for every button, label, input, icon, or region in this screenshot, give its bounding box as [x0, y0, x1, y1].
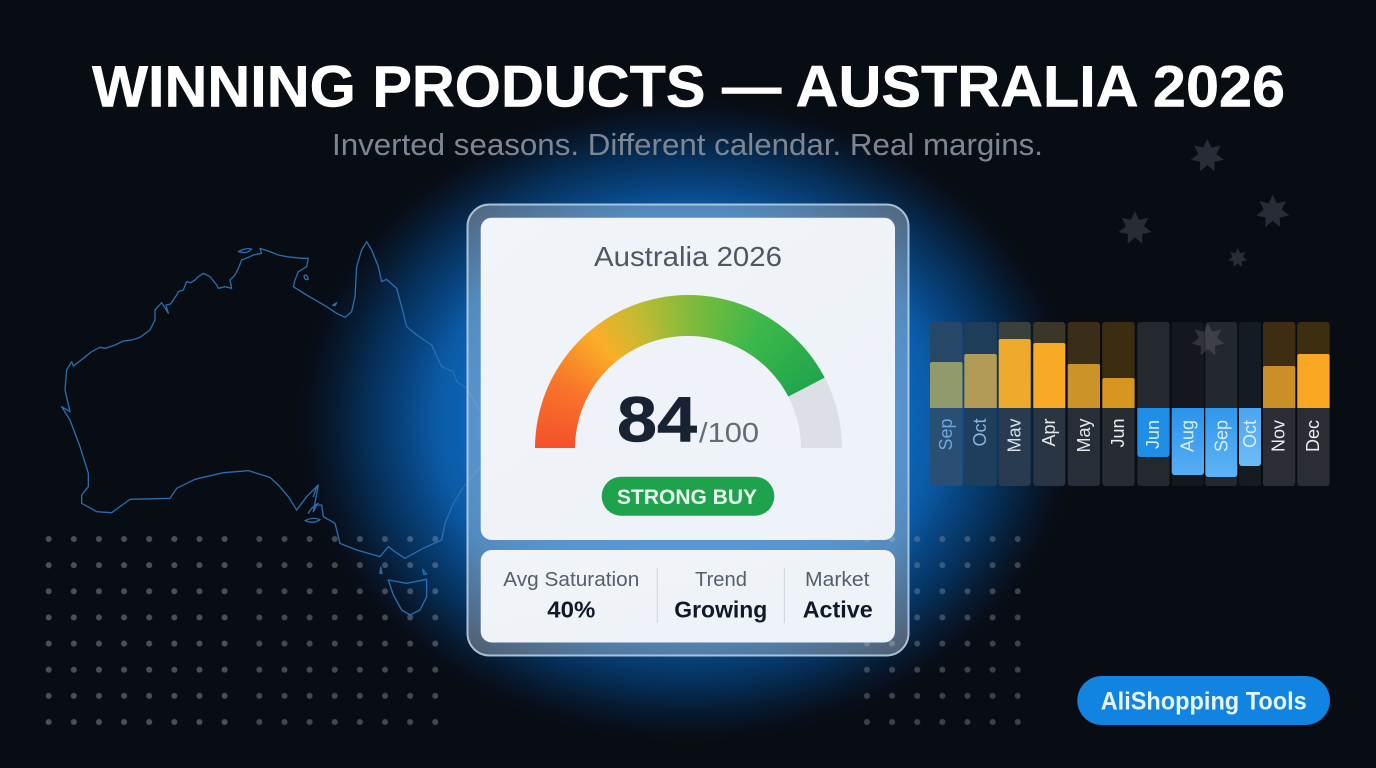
dot grid: left	[36, 526, 448, 735]
islands	[238, 249, 427, 575]
month labels: Sep	[1212, 420, 1232, 452]
score scale: /100	[699, 417, 759, 448]
faint star over chart	[1192, 323, 1224, 355]
column tracks	[930, 322, 1330, 486]
month labels: Sep	[936, 418, 956, 451]
map of Australia outline	[62, 242, 483, 615]
star 2	[1256, 195, 1289, 227]
month labels: Jun	[1108, 418, 1128, 448]
brand badge: AliShopping Tools	[1101, 687, 1307, 715]
mainland coast	[62, 242, 483, 558]
stat: avg saturation: Avg Saturation	[503, 568, 639, 591]
star 3	[1119, 211, 1151, 244]
stat: avg saturation: 40%	[547, 597, 595, 623]
stat: market: Market	[805, 568, 870, 591]
month labels: Oct	[1240, 420, 1260, 448]
blue bars	[1137, 408, 1261, 477]
month labels: Apr	[1039, 418, 1059, 447]
upper track tints	[930, 322, 1330, 408]
panel: score	[481, 218, 895, 540]
month labels: May	[1074, 418, 1094, 453]
Tasmania	[388, 579, 427, 615]
score value: 84	[617, 384, 697, 456]
month labels	[936, 418, 1323, 453]
orange bars	[930, 339, 1330, 408]
stat: avg saturation	[503, 568, 639, 623]
month labels: Jun	[1143, 420, 1163, 449]
dot grid: right	[854, 526, 1030, 735]
month labels: Mav	[1004, 418, 1024, 453]
month labels: Oct	[970, 418, 990, 447]
brand badge	[1077, 676, 1330, 725]
title: WINNING PRODUCTS — AUSTRALIA 2026	[92, 55, 1285, 120]
strong buy pill	[602, 477, 774, 516]
star 1	[1191, 139, 1224, 171]
stat: market: Active	[803, 597, 873, 623]
seasonal bar chart	[930, 322, 1330, 486]
month labels: Nov	[1268, 420, 1288, 452]
stat: trend	[674, 568, 767, 623]
Southern Cross stars	[1119, 139, 1289, 267]
glass score card	[468, 204, 908, 656]
strong buy pill: STRONG BUY	[617, 486, 757, 509]
subtitle: Inverted seasons. Different calendar. Real margins.	[332, 128, 1043, 162]
card heading: Australia 2026	[594, 241, 782, 272]
month labels: Aug	[1178, 420, 1198, 452]
stat: trend: Trend	[695, 568, 747, 591]
gauge arc	[534, 295, 842, 448]
stat: trend: Growing	[674, 597, 767, 623]
card frame	[468, 204, 908, 656]
panel: stats	[481, 550, 895, 642]
month labels: Dec	[1303, 420, 1323, 452]
stat: market	[803, 568, 873, 623]
star 4	[1228, 248, 1247, 267]
